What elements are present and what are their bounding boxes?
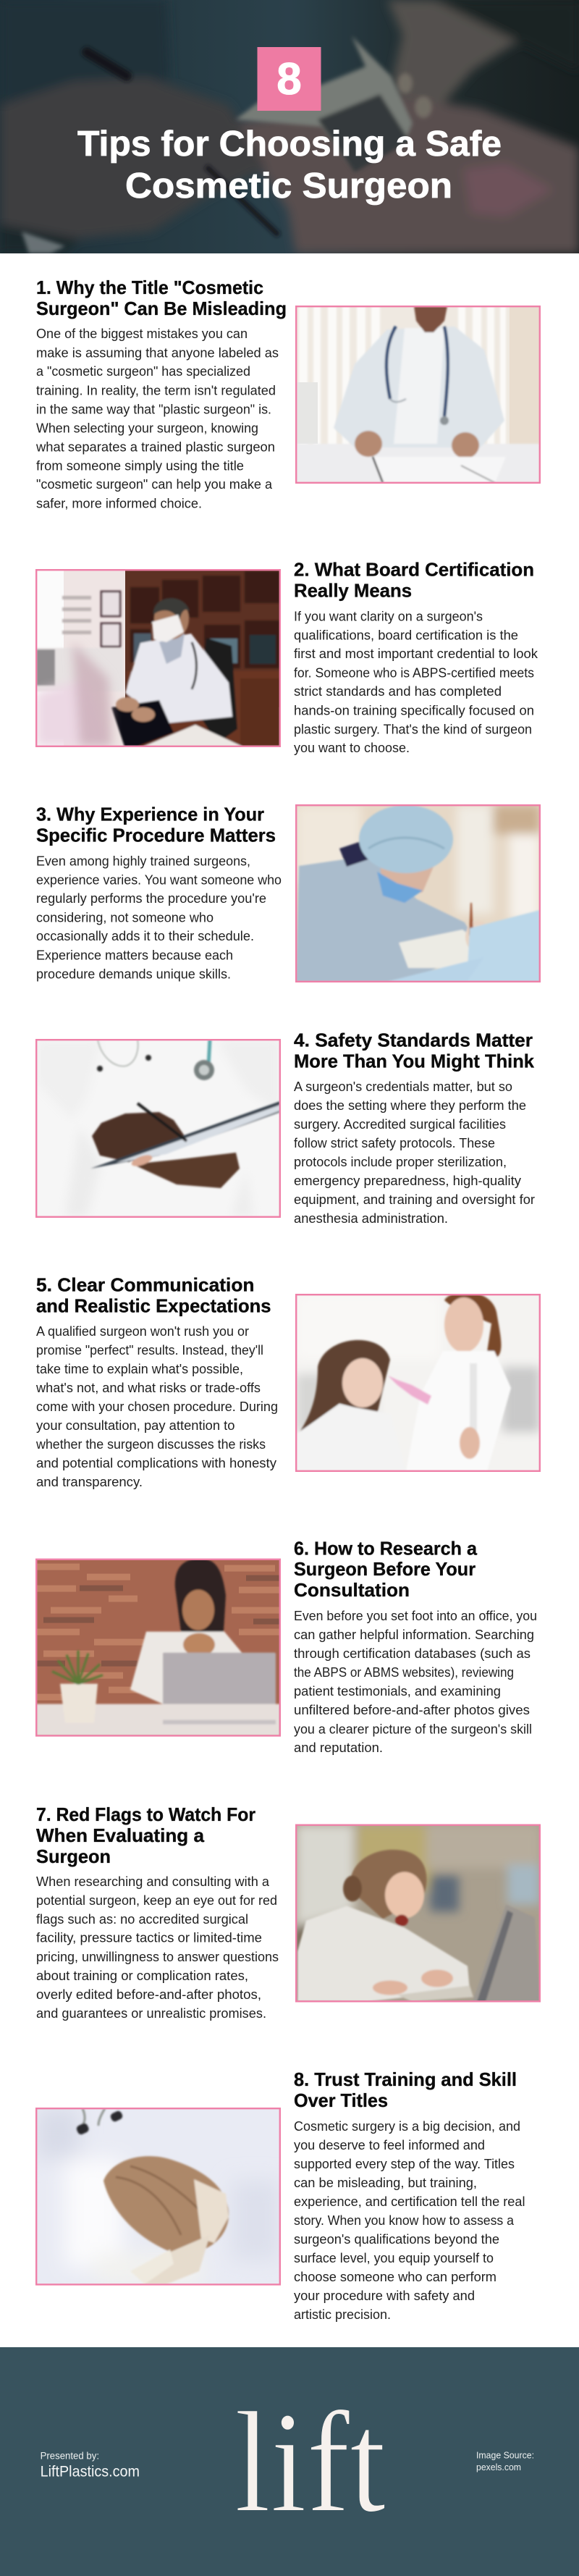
panel: tip 4 [36, 1030, 535, 1226]
panel: tip 5 [35, 1274, 540, 1489]
hero background photo [0, 0, 579, 253]
photo: woman pointing at girl's nose [296, 1292, 540, 1471]
body text: tip 5: and potential complications with honesty [36, 1456, 276, 1470]
body text: tip 4: does the setting where they perform the [294, 1098, 526, 1113]
heading: tip 6: Surgeon Before Your [294, 1558, 476, 1580]
title: Tips for Choosing a Safe [77, 125, 502, 164]
body text: tip 2: hands-on training specifically focused on [294, 703, 534, 717]
body text: tip 2: plastic surgery. That's the kind of surgeon [294, 723, 532, 737]
body text: tip 1: a "cosmetic surgeon" has specialized [36, 364, 250, 379]
body text: tip 6: the ABPS or ABMS websites), reviewing [294, 1665, 514, 1680]
body text: tip 5: what's not, and what risks or trade-offs [35, 1381, 261, 1395]
body text: tip 4: emergency preparedness, high-quality [294, 1174, 521, 1188]
body text: tip 2: you want to choose. [294, 741, 410, 755]
body text: tip 8: supported every step of the way. Titles [294, 2157, 515, 2171]
body text: tip 4: anesthesia administration. [294, 1211, 448, 1226]
body text: tip 8: surgeon's qualifications beyond the [294, 2232, 499, 2247]
heading: tip 6: Consultation [294, 1579, 410, 1601]
body text: tip 8: experience, and certification tell the real [294, 2194, 525, 2209]
body text: tip 6 [294, 1609, 537, 1755]
body text: tip 1: from someone simply using the title [36, 459, 244, 473]
title [77, 125, 502, 206]
heading: tip 1: 1. Why the Title "Cosmetic [36, 277, 263, 298]
panel: tip 7 [36, 1803, 540, 2021]
heading: tip 3: 3. Why Experience in Your [36, 803, 264, 825]
body text: tip 6: patient testimonials, and examining [294, 1684, 501, 1699]
heading: tip 1 [36, 277, 287, 319]
footer [0, 2347, 579, 2576]
body text: tip 2: for. Someone who is ABPS-certified meets [294, 665, 534, 680]
body text: tip 3: procedure demands unique skills. [36, 967, 231, 982]
heading: tip 3: Specific Procedure Matters [36, 825, 276, 846]
heading: tip 8 [294, 2068, 517, 2111]
body text: tip 7: flags such as: no accredited surgical [36, 1912, 248, 1927]
image source credit: pexels.com [476, 2462, 521, 2472]
panel: tip 3 [36, 803, 540, 982]
body text: tip 8: choose someone who can perform [294, 2270, 496, 2284]
body text: tip 5: take time to explain what's possible, [36, 1362, 243, 1376]
heading: tip 6 [294, 1537, 478, 1601]
body text: tip 5 [35, 1324, 278, 1489]
body text: tip 2: strict standards and has completed [294, 684, 502, 699]
body text: tip 8 [294, 2119, 525, 2322]
body text: tip 8: story. When you know how to assess a [294, 2213, 515, 2228]
body text: tip 4: surgery. Accredited surgical facilities [294, 1117, 506, 1132]
body text: tip 3: experience varies. You want someone who [36, 873, 282, 888]
body text: tip 4 [294, 1079, 535, 1226]
body text: tip 7: overly edited before-and-after photos, [36, 1987, 261, 2002]
heading: tip 4: 4. Safety Standards Matter [294, 1030, 533, 1051]
heading: tip 2 [294, 558, 534, 601]
body text: tip 6: through certification databases (such as [294, 1646, 531, 1661]
body text: tip 5: your consultation, pay attention to [36, 1418, 234, 1433]
heading: tip 1: Surgeon" Can Be Misleading [36, 298, 287, 319]
body text: tip 7: When researching and consulting with a [36, 1874, 270, 1889]
body text: tip 1: make is assuming that anyone labeled as [36, 345, 279, 360]
body text: tip 3: Even among highly trained surgeons, [36, 854, 250, 868]
body text: tip 3: regularly performs the procedure you're [36, 891, 266, 906]
panel: tip 8 [36, 2068, 525, 2322]
body text: tip 8: Cosmetic surgery is a big decision, and [294, 2119, 520, 2134]
heading: tip 8: Over Titles [294, 2089, 388, 2111]
body text: tip 5: whether the surgeon discusses the risks [35, 1437, 266, 1452]
panel: tip 2 [36, 558, 538, 755]
photo: doctor's hands writing on clipboard [36, 1040, 280, 1217]
heading: tip 5: and Realistic Expectations [36, 1295, 271, 1317]
heading: tip 2: 2. What Board Certification [294, 558, 534, 580]
heading: tip 6: 6. How to Research a [294, 1537, 478, 1559]
body text: tip 2 [294, 609, 538, 755]
body text: tip 1: When selecting your surgeon, knowing [36, 421, 258, 436]
heading: tip 7: Surgeon [36, 1845, 111, 1867]
presented by credit: LiftPlastics.com [41, 2463, 140, 2480]
pink number badge: 8 [276, 54, 302, 104]
body text: tip 7: about training or complication rates, [36, 1969, 248, 1983]
body text: tip 5: and transparency. [36, 1475, 143, 1489]
body text: tip 6: unfiltered before-and-after photos gives [294, 1703, 530, 1717]
body text: tip 7: facility, pressure tactics or limited-time [36, 1931, 262, 1945]
body text: tip 7 [36, 1874, 279, 2021]
body text: tip 6: Even before you set foot into an office, you [294, 1609, 537, 1623]
heading: tip 7 [36, 1803, 255, 1867]
body text: tip 3: Experience matters because each [36, 948, 233, 962]
photo: doctor at desk with stethoscope [296, 306, 540, 483]
body text: tip 3: considering, not someone who [36, 910, 214, 925]
title: Cosmetic Surgeon [125, 167, 452, 206]
body text: tip 1: what separates a trained plastic surgeon [35, 439, 275, 454]
heading: tip 4: More Than You Might Think [294, 1050, 535, 1072]
body text: tip 8: can be misleading, but training, [294, 2176, 477, 2190]
body text: tip 4: follow strict safety protocols. These [294, 1136, 495, 1150]
heading: tip 4 [294, 1030, 535, 1072]
photo: masked doctor at computer in office [36, 570, 280, 746]
body text: tip 5: A qualified surgeon won't rush you or [36, 1324, 249, 1339]
body text: tip 2: If you want clarity on a surgeon's [294, 609, 483, 623]
body text: tip 1: training. In reality, the term isn't regulated [36, 383, 276, 397]
photo: surgeon in blue cap and mask operating [296, 805, 540, 982]
lift logo wordmark: lift [234, 2383, 386, 2543]
body text: tip 5: promise "perfect" results. Instead, they'll [36, 1343, 263, 1358]
heading: tip 8: 8. Trust Training and Skill [294, 2068, 517, 2090]
body text: tip 4: protocols include proper sterilization, [294, 1155, 507, 1169]
body text: tip 8: your procedure with safety and [294, 2289, 475, 2303]
body text: tip 2: first and most important credential to look [294, 647, 538, 661]
body text: tip 4: equipment, and training and oversight for [294, 1192, 535, 1207]
photo: woman at laptop against brick wall [36, 1559, 280, 1736]
heading: tip 5: 5. Clear Communication [36, 1274, 254, 1296]
body text: tip 1: One of the biggest mistakes you can [36, 327, 248, 341]
image source credit: Image Source: [476, 2449, 534, 2460]
body text: tip 1: in the same way that "plastic surgeon" is. [36, 403, 271, 417]
photo: gloved hands against white coat [36, 2108, 280, 2285]
body text: tip 8: surface level, you equip yourself to [294, 2251, 494, 2265]
body text: tip 8: you deserve to feel informed and [294, 2138, 485, 2152]
heading: tip 7: 7. Red Flags to Watch For [36, 1803, 255, 1825]
body text: tip 3: occasionally adds it to their schedule. [36, 929, 254, 943]
body text: tip 1: "cosmetic surgeon" can help you make a [36, 477, 273, 492]
body text: tip 6: can gather helpful information. Searching [294, 1628, 534, 1642]
heading: tip 2: Really Means [294, 579, 412, 601]
body text: tip 6: and reputation. [294, 1741, 383, 1755]
image source credit [476, 2449, 534, 2472]
heading: tip 3 [36, 803, 276, 846]
photo: shocked woman at laptop [296, 1824, 540, 2001]
presented by credit [41, 2451, 140, 2480]
presented by credit: Presented by: [41, 2451, 99, 2462]
body text: tip 7: pricing, unwillingness to answer questions [36, 1950, 279, 1964]
body text: tip 2: qualifications, board certification is the [294, 628, 518, 643]
hero header [0, 0, 579, 253]
heading: tip 5 [36, 1274, 271, 1317]
body text: tip 4: A surgeon's credentials matter, but so [294, 1079, 512, 1094]
heading: tip 7: When Evaluating a [36, 1824, 205, 1846]
body text: tip 1 [35, 327, 279, 510]
body text: tip 1: safer, more informed choice. [36, 496, 202, 510]
panel: tip 1 [35, 277, 540, 510]
panel: tip 6 [36, 1537, 537, 1755]
body text: tip 7: potential surgeon, keep an eye out for red [36, 1893, 277, 1908]
body text: tip 3 [36, 854, 282, 982]
pink number badge [258, 47, 321, 111]
body text: tip 5: come with your chosen procedure. During [36, 1399, 278, 1414]
body text: tip 8: artistic precision. [294, 2307, 391, 2322]
body text: tip 7: and guarantees or unrealistic promises. [36, 2006, 266, 2021]
body text: tip 6: you a clearer picture of the surgeon's skill [294, 1722, 532, 1736]
